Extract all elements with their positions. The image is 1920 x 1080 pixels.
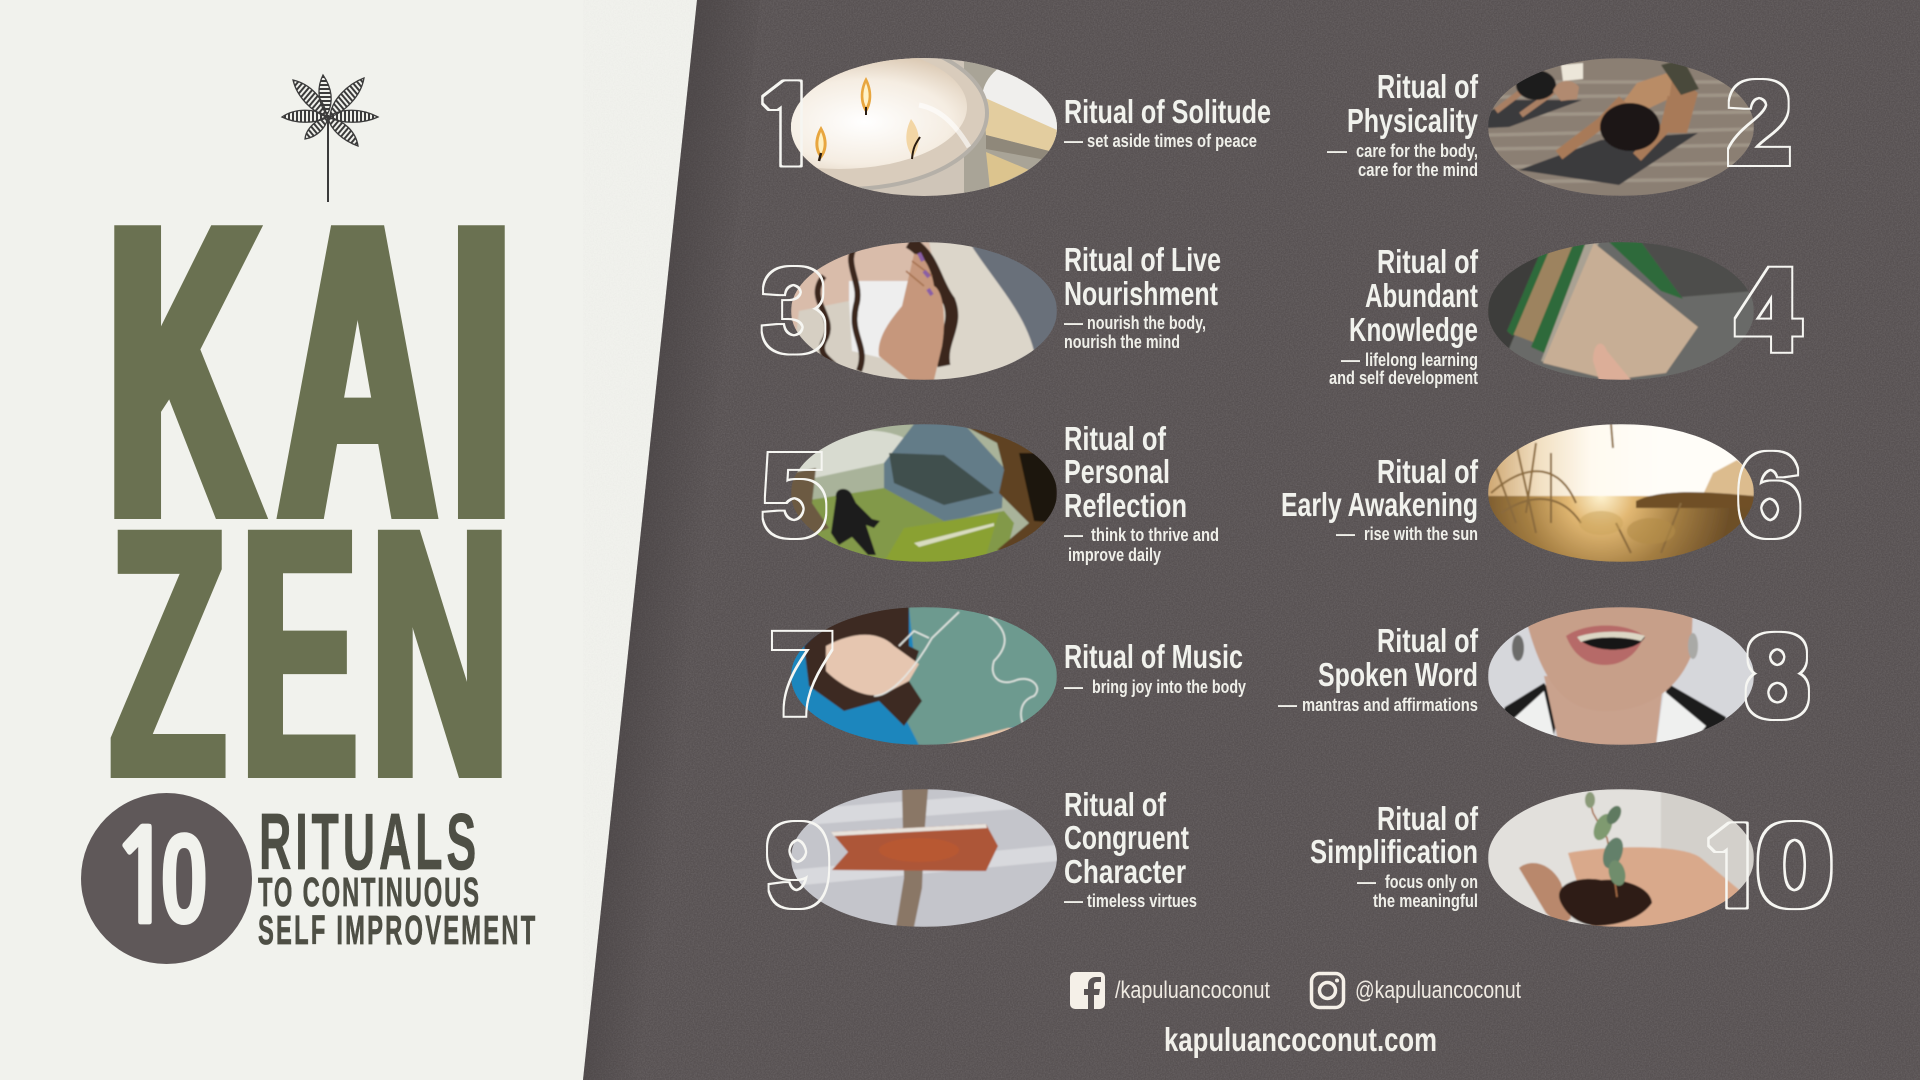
photo: hiker overlooking valley [791, 424, 1057, 562]
number 9: 9 [766, 800, 831, 930]
facebook handle: /kapuluancoconut [1115, 977, 1270, 1004]
number 10 [1696, 801, 1833, 930]
heading: Early Awakening [1281, 486, 1478, 523]
ritual 3: live nourishment [762, 241, 1221, 380]
heading [1318, 622, 1479, 693]
heading: Ritual of [1377, 243, 1479, 280]
title: KAI [108, 132, 511, 610]
heading [1347, 68, 1479, 139]
photo: sunrise field [1488, 424, 1754, 562]
number 8: 8 [1745, 611, 1810, 741]
photo: smiling mouth [1488, 607, 1754, 745]
title: KAI: I [452, 132, 511, 610]
ritual 10: simplification [1310, 789, 1833, 930]
description: timeless virtues [1087, 891, 1197, 911]
photo: seedling in hands [1488, 789, 1754, 927]
number 3: 3 [762, 245, 827, 375]
number 4: 4 [1736, 245, 1801, 375]
title: KAI: K [108, 132, 262, 610]
heading: Ritual of Live [1064, 241, 1221, 278]
description: — [1341, 350, 1360, 370]
ritual 6: early awakening [1281, 424, 1802, 562]
heading [1310, 800, 1479, 870]
number 10: 0 [1756, 801, 1833, 930]
badge: 10 [81, 793, 252, 964]
heading [1064, 786, 1189, 890]
subtitle: 10 rituals to continuous self improvement: SELF IMPROVEMENT [258, 909, 536, 954]
icon: palm tree [282, 75, 378, 202]
description [1357, 872, 1478, 911]
heading: Ritual of Music [1064, 638, 1243, 675]
description: rise with the sun [1364, 524, 1478, 544]
heading: Spoken Word [1318, 656, 1478, 693]
heading: Personal [1064, 453, 1170, 490]
ritual 7: music [770, 607, 1246, 745]
subtitle: 10 rituals to continuous self improvement [258, 796, 536, 954]
subtitle: 10 rituals to continuous self improvement: TO CONTINUOUS [258, 871, 479, 916]
description: — [1336, 524, 1355, 544]
description [1064, 677, 1246, 697]
heading: Ritual of [1377, 68, 1479, 105]
description: — [1357, 872, 1376, 892]
ritual 2: physicality [1327, 58, 1792, 196]
heading [1064, 241, 1221, 312]
heading: Congruent [1064, 819, 1189, 856]
description: — [1064, 677, 1083, 697]
ritual 4: abundant knowledge [1329, 242, 1801, 388]
number 2: 2 [1727, 58, 1792, 188]
description: — [1064, 131, 1083, 151]
heading: Ritual of [1377, 622, 1479, 659]
description [1336, 524, 1478, 544]
description: nourish the body, [1087, 313, 1206, 333]
description [1064, 313, 1206, 352]
heading: Reflection [1064, 487, 1187, 524]
instagram handle: @kapuluancoconut [1355, 977, 1521, 1004]
description: care for the mind [1358, 160, 1478, 180]
photo: yoga on deck [1488, 58, 1754, 196]
photo: candles [791, 58, 1057, 196]
icon: instagram [1312, 974, 1344, 1008]
photo: books [1488, 242, 1754, 380]
title: ZEN: E [241, 456, 357, 852]
description: set aside times of peace [1087, 131, 1257, 151]
ritual 8: spoken word [1278, 607, 1810, 745]
icon: facebook [1070, 972, 1105, 1009]
background: dark textured right panel [583, 0, 1920, 1080]
description: nourish the mind [1064, 332, 1180, 352]
description: and self development [1329, 368, 1478, 388]
description [1064, 891, 1197, 911]
description: — [1327, 141, 1347, 161]
heading: Nourishment [1064, 275, 1218, 312]
ritual 5: personal reflection [762, 420, 1219, 565]
heading: Character [1064, 853, 1186, 890]
badge: 10: 1 [109, 814, 176, 942]
ritual 9: congruent character [766, 786, 1197, 930]
ritual 1: solitude [761, 58, 1270, 196]
subtitle: 10 rituals to continuous self improvement: RITUALS [259, 796, 476, 886]
heading: Ritual of [1377, 453, 1479, 490]
heading [1349, 243, 1479, 348]
description: lifelong learning [1365, 350, 1478, 370]
description [1064, 525, 1219, 565]
heading: Ritual of [1377, 800, 1479, 837]
description: — [1064, 313, 1083, 333]
heading: Physicality [1347, 102, 1478, 139]
description: improve daily [1068, 545, 1161, 565]
description [1329, 350, 1478, 388]
title: ZEN: Z [110, 456, 226, 852]
description: the meaningful [1373, 891, 1478, 911]
description: — [1064, 891, 1083, 911]
footer: social links and website [1070, 972, 1521, 1058]
heading: Ritual of [1064, 420, 1167, 457]
number 5: 5 [762, 430, 827, 560]
description: think to thrive and [1091, 525, 1219, 545]
heading [1281, 453, 1479, 523]
description [1327, 141, 1478, 180]
title: ZEN [110, 454, 510, 852]
description: mantras and affirmations [1302, 695, 1478, 715]
heading [1064, 420, 1187, 524]
photo: praying hands [791, 242, 1057, 380]
heading: Ritual of Solitude [1064, 93, 1271, 130]
description: — [1064, 525, 1083, 545]
heading: Simplification [1310, 833, 1478, 870]
website: kapuluancoconut.com [1164, 1021, 1437, 1058]
number 1: 1 [750, 75, 826, 179]
number 7: 7 [770, 609, 835, 739]
photo: wooden arrow sign [791, 789, 1057, 927]
title: ZEN: N [370, 454, 510, 852]
number 10: 1 [1696, 817, 1772, 921]
description: bring joy into the body [1092, 677, 1246, 697]
description: — [1278, 695, 1297, 715]
heading: Ritual of [1064, 786, 1167, 823]
title: KAI: A [279, 132, 436, 610]
photo: woman with earphones [791, 607, 1057, 745]
description: care for the body, [1356, 141, 1478, 161]
description: focus only on [1385, 872, 1478, 892]
number 6: 6 [1737, 430, 1802, 560]
badge: 10: 0 [160, 808, 208, 951]
heading: Abundant [1365, 277, 1478, 314]
heading: Knowledge [1349, 311, 1478, 348]
